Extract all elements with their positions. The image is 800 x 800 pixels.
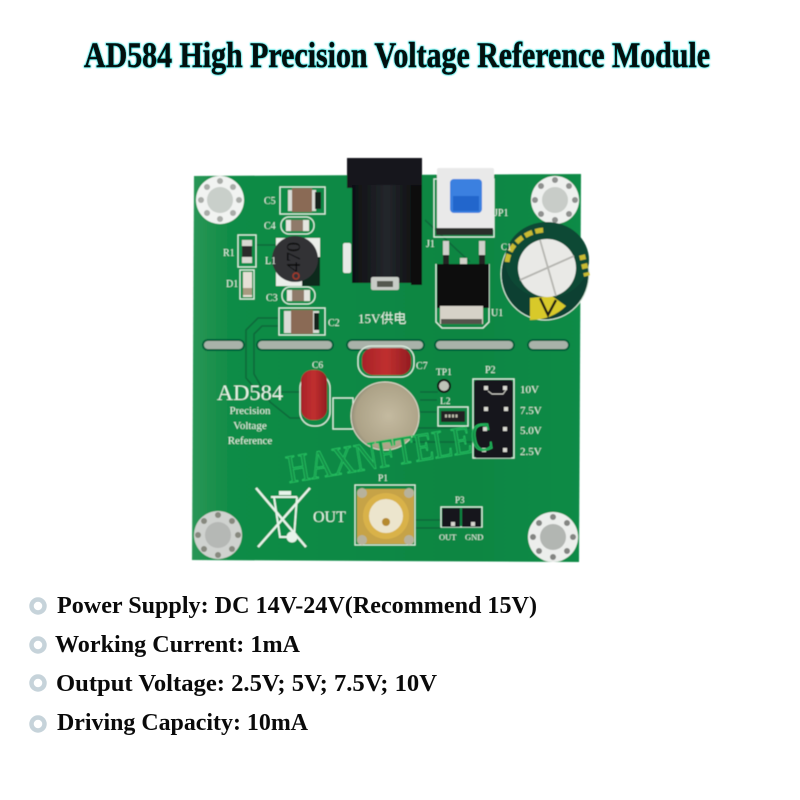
component: capacitor C2	[279, 308, 340, 335]
component: inductor L2: L2	[440, 397, 451, 407]
component: regulator U1	[436, 255, 503, 328]
component: capacitor C3: C3	[266, 293, 278, 304]
labels: output voltages	[520, 384, 542, 458]
component: resistor R1 and diode D1	[223, 235, 256, 299]
component: film capacitor C7	[358, 346, 428, 377]
icon: mounting hole bottom left	[194, 511, 242, 559]
component: capacitor C4	[264, 217, 314, 234]
label: AD584 board marking	[217, 380, 283, 447]
component: push switch JP1: J1	[426, 239, 435, 250]
component: capacitor C5	[264, 187, 325, 214]
component: test point TP1	[436, 368, 452, 392]
label: AD584 board marking: Voltage	[233, 420, 267, 432]
component: capacitor C4: C4	[264, 221, 276, 232]
component: inductor L1: L1	[265, 256, 276, 267]
component: regulator U1: U1	[491, 308, 503, 319]
bullet item: output voltage: Output Voltage: 2.5V; 5V; 7.5V; 10V	[56, 671, 438, 697]
icon: mounting hole bottom right	[528, 512, 578, 562]
component: SMA connector P1	[355, 474, 415, 545]
component: electrolytic capacitor	[501, 222, 589, 320]
circuit board photo	[192, 158, 589, 562]
component: voltage selection header P2: P2	[485, 365, 496, 376]
component: test point TP1: TP1	[436, 368, 452, 378]
watermark: HAXNFTELEC: HAXNFTELEC	[283, 413, 496, 492]
component: DC power jack	[343, 158, 422, 290]
component: resistor R1 and diode D1: R1	[223, 248, 235, 259]
label: 15V supply: 15V供电	[358, 311, 406, 326]
component: capacitor C2: C2	[328, 318, 340, 329]
component: output header P3	[439, 495, 483, 542]
feature list	[32, 593, 537, 736]
component: film capacitor C7: C7	[416, 361, 428, 372]
component: film capacitor C6	[300, 361, 330, 426]
component: inductor L1: 470	[283, 242, 305, 272]
icon: mounting hole top right	[531, 176, 579, 224]
component: push switch JP1: JP1	[494, 208, 508, 219]
component: electrolytic capacitor: C1	[501, 242, 512, 252]
traces	[246, 220, 474, 528]
label: OUT: OUT	[313, 509, 346, 526]
slot row	[203, 340, 569, 350]
component: voltage selection header P2	[473, 365, 514, 458]
bullet item: working current: Working Current: 1mA	[55, 632, 301, 658]
icon: mounting hole top left	[196, 176, 244, 224]
component: capacitor C5: C5	[264, 196, 276, 207]
component: AD584 metal can	[333, 382, 419, 450]
label: AD584 board marking: AD584	[217, 380, 283, 405]
label: AD584 board marking: Reference	[228, 435, 272, 447]
panel: PCB base	[192, 174, 581, 562]
component: inductor L1	[265, 236, 320, 286]
component: resistor R1 and diode D1: D1	[226, 279, 238, 290]
label: AD584 board marking: Precision	[230, 405, 271, 417]
bullet item: power supply: Power Supply: DC 14V-24V(Recommend 15V)	[57, 593, 537, 619]
labels: output voltages: 10V	[520, 384, 539, 396]
component: SMA connector P1: P1	[378, 474, 388, 484]
labels: output voltages: 5.0V	[520, 425, 542, 437]
component: film capacitor C6: C6	[312, 361, 323, 371]
component: output header P3: GND	[465, 532, 483, 542]
labels: output voltages: 7.5V	[520, 405, 542, 417]
bullet item: driving capacity: Driving Capacity: 10mA	[57, 710, 309, 736]
labels: output voltages: 2.5V	[520, 446, 542, 458]
component: output header P3: OUT	[439, 532, 457, 542]
component: capacitor C3	[266, 287, 315, 304]
component: push switch JP1	[426, 168, 508, 258]
component: inductor L2	[438, 397, 468, 426]
component: output header P3: P3	[455, 495, 465, 505]
icon: crossed-out waste bin	[256, 488, 310, 547]
